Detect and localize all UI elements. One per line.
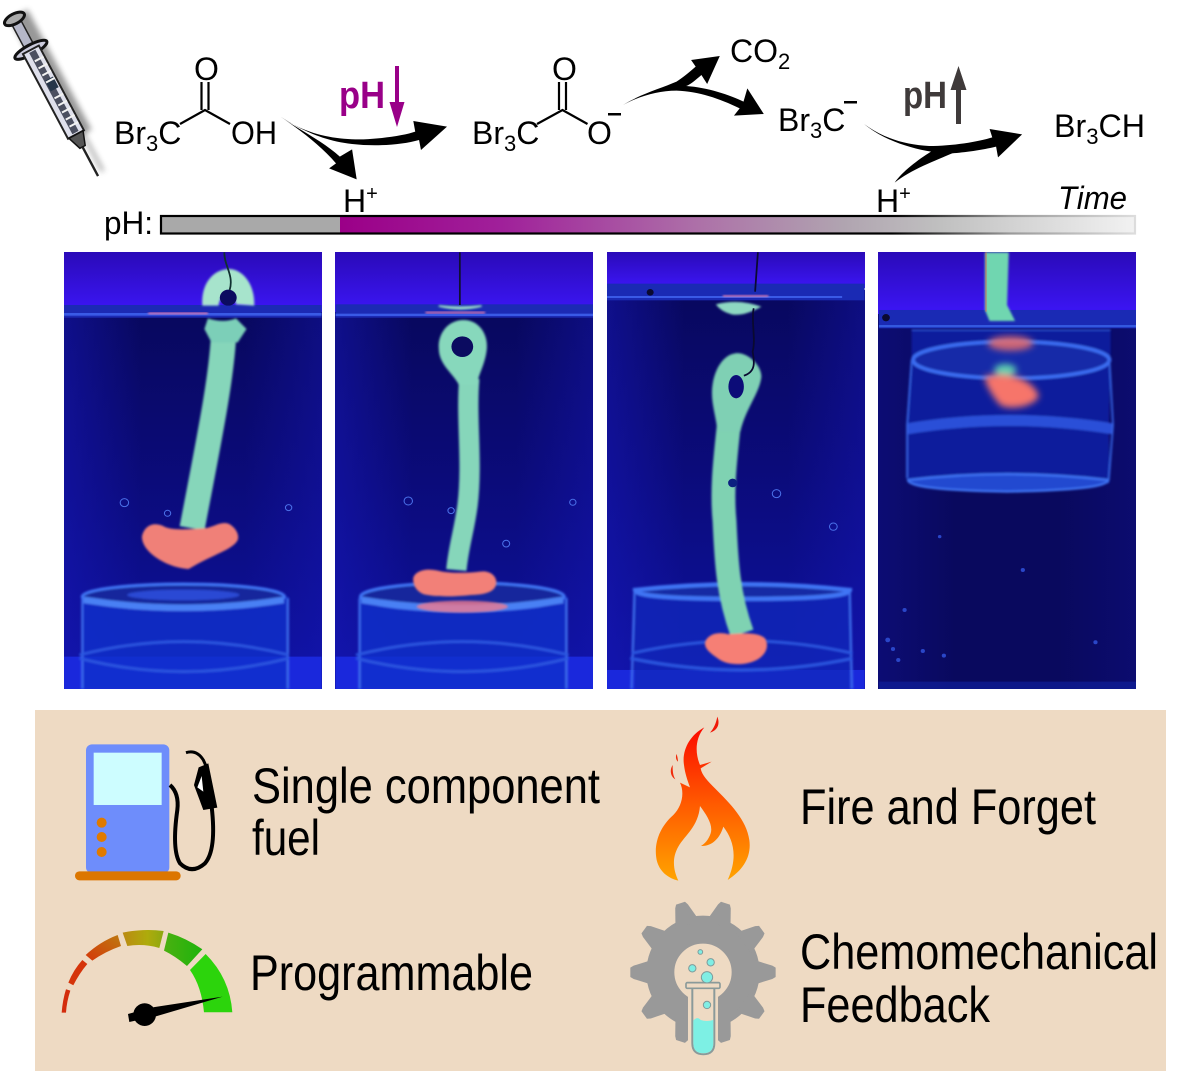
icon: fuel pump [75, 744, 217, 880]
pH time bar: pH: [104, 205, 153, 241]
icon: gear with test tube [630, 899, 776, 1057]
label: H+ consumed: H [876, 183, 899, 219]
text: single component fuel: fuel [252, 810, 320, 866]
label: pH decreases: pH [339, 75, 385, 117]
molecule: tribromoacetate: Br [472, 115, 504, 151]
label: H+ released: + [366, 183, 378, 205]
arrow: protonation [864, 124, 1022, 183]
panel: photo 3, gel foot sinks into dish [607, 252, 865, 690]
pH time bar [104, 205, 1135, 241]
label: H+ released: H [343, 183, 366, 219]
glass dish [356, 583, 569, 689]
text: single component fuel: Single component [252, 758, 600, 814]
text: programmable: Programmable [250, 945, 533, 1001]
gel strip [985, 252, 1015, 321]
icon: syringe [0, 6, 114, 184]
panel: photo 2, gel foot resting on dish [335, 252, 593, 690]
molecule: tribromoacetic acid: C [158, 115, 181, 151]
label: H+ consumed: + [899, 183, 911, 205]
molecule: tribromoacetate: O [552, 51, 577, 87]
bubbles [772, 490, 837, 530]
molecule: tribromoacetate: C [516, 115, 539, 151]
label: tribromomethyl anion: C [822, 102, 845, 138]
arrow: decarboxylation [623, 56, 764, 116]
molecule: tribromoacetic acid: 3 [146, 131, 158, 156]
panel: photo 4, dish lifted by gel [878, 252, 1137, 690]
panel: photo 1, gel attached and foot above dish [64, 252, 322, 690]
gel arm with eye [705, 302, 767, 664]
gel foot inside dish [984, 336, 1039, 408]
gel arm [142, 269, 254, 569]
glass dish [630, 584, 853, 689]
panel: features [35, 710, 1166, 1071]
label: tribromomethyl anion [778, 101, 857, 143]
molecule: tribromoacetic acid: Br [114, 115, 146, 151]
molecule: tribromoacetic acid: OH [231, 115, 277, 151]
label: CO2: 2 [778, 49, 790, 74]
label: pH decreases [339, 66, 404, 127]
label: bromoform: CH [1099, 108, 1145, 144]
bubbles [885, 535, 1098, 662]
label: bromoform: Br [1054, 108, 1086, 144]
icon: flame [656, 717, 750, 881]
molecule: tribromoacetic acid: O [194, 51, 219, 87]
reaction scheme [114, 33, 1145, 219]
glass dish [79, 584, 289, 689]
lifted dish [907, 330, 1113, 492]
label: bromoform: 3 [1086, 124, 1099, 149]
label: CO2: CO [730, 33, 778, 69]
bubbles [404, 497, 576, 547]
text: fire and forget: Fire and Forget [800, 779, 1096, 835]
label: pH increases [903, 66, 966, 124]
molecule: tribromoacetate: O [587, 115, 612, 151]
text: single component fuel [252, 758, 600, 866]
text: chemomechanical feedback [800, 924, 1158, 1033]
label: tribromomethyl anion: Br [778, 102, 810, 138]
icon: gauge [62, 930, 232, 1026]
label: pH increases: pH [903, 75, 947, 117]
molecule: tribromoacetate: 3 [504, 131, 516, 156]
label: time: Time [1058, 180, 1127, 216]
label: tribromomethyl anion: 3 [810, 118, 822, 143]
text: chemomechanical feedback: Feedback [800, 977, 991, 1033]
molecule: tribromoacetic acid [114, 51, 277, 156]
gel arm with eye [413, 306, 508, 613]
bubbles [120, 499, 292, 516]
arrow: deprotonation with H+ release [281, 117, 447, 179]
molecule: tribromoacetate [472, 51, 621, 156]
